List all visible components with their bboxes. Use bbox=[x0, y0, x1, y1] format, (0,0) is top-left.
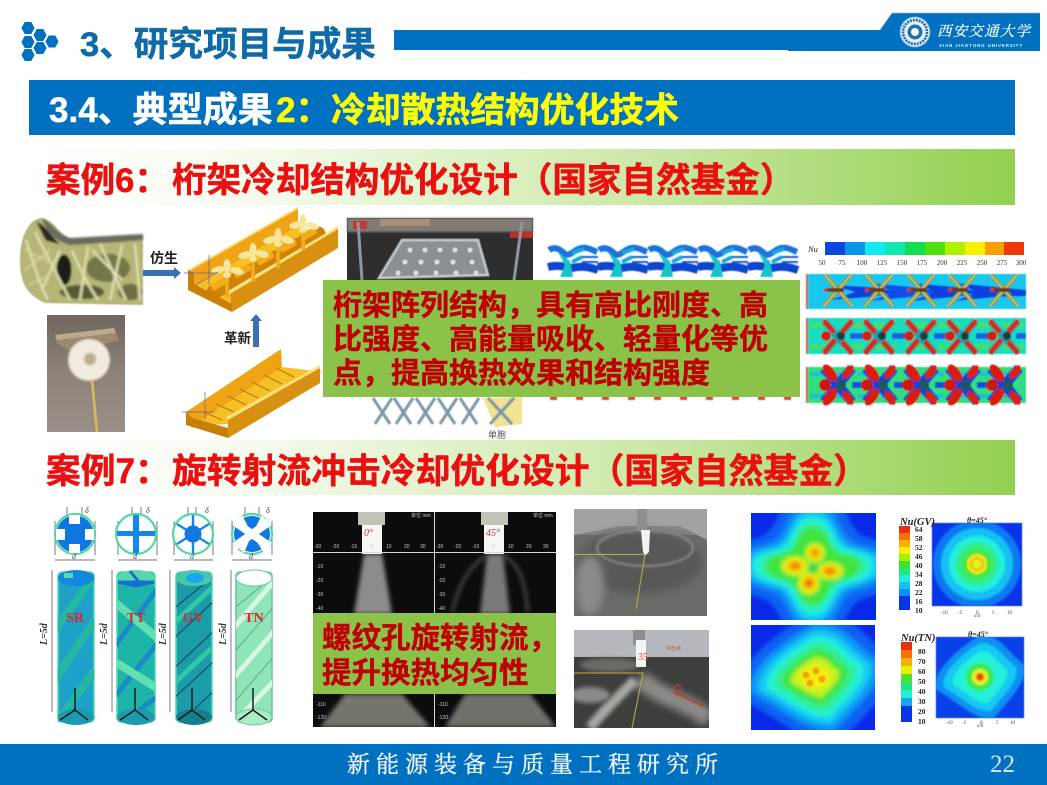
chart: Nu(TN) contour bbox=[900, 630, 1025, 729]
chart: Nu colour scale: Nu bbox=[807, 244, 818, 254]
chart: Nu(TN) contour: 80 bbox=[918, 647, 926, 656]
diagram: swirl tubes SR TT GV TN: L=5d bbox=[158, 622, 169, 646]
tube: SR: SR bbox=[66, 611, 85, 626]
chart: Nu(GV) contour: x/d bbox=[973, 614, 981, 619]
chart: Nu colour scale: 275 bbox=[997, 259, 1008, 267]
footer bar: 新能源装备与质量工程研究所 bbox=[347, 752, 724, 777]
figure: lattice unit cell: 单胞 bbox=[488, 429, 506, 440]
chart: Nu(TN) contour: 10 bbox=[1010, 721, 1016, 726]
tube: GV: GV bbox=[182, 611, 204, 626]
tube: SR bbox=[55, 570, 95, 725]
diagram: swirl hole cross-sections: d bbox=[190, 552, 195, 561]
figure: flow structures bbox=[548, 248, 798, 398]
photo: bone cross-section bbox=[20, 218, 143, 305]
chart: Nu colour scale bbox=[807, 242, 1027, 267]
header icon: honeycomb bbox=[22, 22, 58, 60]
chart: Nu contour rows bbox=[806, 274, 1026, 408]
chart: Nu(GV) contour: 40 bbox=[915, 561, 923, 570]
photo: jet flow visualisation: 30 bbox=[543, 544, 549, 550]
chart: Nu(GV) contour: 34 bbox=[915, 570, 923, 579]
callout: lattice array benefits: 桁架阵列结构，具有高比刚度、高 bbox=[333, 289, 768, 322]
diagram: swirl tubes SR TT GV TN bbox=[39, 570, 275, 730]
logo: Xi'an Jiaotong University: 西安交通大学 bbox=[937, 23, 1032, 40]
diagram: swirl tubes SR TT GV TN: L=5d bbox=[218, 622, 229, 646]
diagram: swirl hole cross-sections: δ bbox=[85, 506, 89, 515]
figure: lattice unit cell bbox=[373, 397, 522, 440]
photo: jet flow visualisation: -10 bbox=[472, 544, 479, 550]
photo: jet flow visualisation: -120 bbox=[316, 715, 326, 721]
photo: jet flow visualisation: -30 bbox=[436, 544, 443, 550]
photo: jet flow visualisation: -20 bbox=[316, 578, 323, 584]
callout: lattice array benefits: 点，提高换热效果和结构强度 bbox=[333, 357, 710, 390]
photo: jet flow visualisation: -20 bbox=[454, 544, 461, 550]
chart: Nu(GV) contour: 10 bbox=[1007, 611, 1012, 616]
footer bar: 22 bbox=[990, 751, 1015, 778]
photo: jet flow visualisation: -30 bbox=[316, 592, 323, 598]
banner: subsection title: 3.4、典型成果 bbox=[49, 91, 273, 130]
banner: case 7 title: 案例7： bbox=[46, 452, 170, 491]
photo: jet flow visualisation: -20 bbox=[332, 544, 339, 550]
chart: Nu(GV) contour: 28 bbox=[915, 579, 923, 588]
diagram: swirl hole cross-sections: δ bbox=[266, 506, 270, 515]
photo: jet flow visualisation: -30 bbox=[438, 592, 445, 598]
photo: dandelion carrying lattice bbox=[47, 315, 125, 432]
chart: Nu(GV) contour: 58 bbox=[915, 534, 923, 543]
photo: jet flow visualisation bbox=[313, 512, 556, 727]
diagram: swirl hole cross-sections: δ bbox=[146, 506, 150, 515]
photo: jet flow visualisation: -20 bbox=[438, 578, 445, 584]
chart: Nu(TN) contour: -5 bbox=[962, 721, 967, 726]
photo: jet flow visualisation: 10 bbox=[508, 544, 514, 550]
tube: TT: TT bbox=[127, 611, 146, 626]
photo: jet impingement angled: 冲击点 bbox=[666, 645, 681, 652]
banner: case 6 title: 案例6： bbox=[46, 162, 169, 200]
callout: threaded-hole swirl jet: 螺纹孔旋转射流， bbox=[322, 622, 558, 655]
photo: jet impingement angled: 35 bbox=[638, 652, 648, 663]
diagram: swirl hole cross-sections: d bbox=[249, 552, 254, 561]
chart: Nu colour scale: 150 bbox=[897, 259, 908, 267]
chart: Nu(GV) contour: 46 bbox=[915, 552, 923, 561]
chart: Nu colour scale: 50 bbox=[818, 259, 826, 267]
photo: jet flow visualisation: 0 bbox=[492, 544, 495, 550]
arrow: biomimicry: 仿生 bbox=[150, 250, 178, 266]
tube: TT bbox=[116, 570, 156, 725]
banner: case 6 title: 桁架冷却结构优化设计（国家自然基金） bbox=[172, 162, 794, 200]
chart: Nu(TN) contour: 50 bbox=[918, 677, 926, 686]
callout: lattice array benefits: 比强度、高能量吸收、轻量化等优 bbox=[333, 323, 768, 356]
photo: jet flow visualisation: 20 bbox=[404, 544, 410, 550]
photo: jet flow visualisation: 0 bbox=[370, 544, 373, 550]
chart: Nu(TN) contour: 10 bbox=[918, 717, 926, 726]
logo: Xi'an Jiaotong University: XIAN JIAOTONG UNIVERSITY bbox=[939, 43, 1023, 48]
photo: jet flow visualisation: 10 bbox=[386, 544, 392, 550]
photo: jet flow visualisation: -10 bbox=[316, 564, 323, 570]
banner: subsection title: 2： bbox=[276, 91, 330, 130]
chart: Nu colour scale: 200 bbox=[937, 259, 948, 267]
chart: Nu(GV) contour: 5 bbox=[992, 611, 995, 616]
chart: heat map upper bbox=[751, 513, 876, 620]
chart: Nu(TN) contour: 70 bbox=[918, 657, 926, 666]
photo: jet flow visualisation: -40 bbox=[316, 606, 323, 612]
chart: Nu(GV) contour: θ=45° bbox=[967, 516, 988, 525]
photo: jet flow visualisation: 45° bbox=[486, 528, 500, 539]
chart: Nu colour scale: 250 bbox=[977, 259, 988, 267]
tube: TN: TN bbox=[244, 611, 264, 626]
chart: Nu(TN) contour: Nu(TN) bbox=[900, 633, 935, 644]
chart: Nu(TN) contour: -10 bbox=[946, 721, 953, 726]
chart: Nu(TN) contour: 20 bbox=[918, 707, 926, 716]
photo: jet flow visualisation: -110 bbox=[438, 702, 448, 708]
chart: Nu(GV) contour: Nu(GV) bbox=[899, 517, 935, 528]
chart: Nu(GV) contour: -5 bbox=[958, 611, 963, 616]
banner: subsection title: 冷却散热结构优化技术 bbox=[331, 91, 679, 130]
arrow: innovation bbox=[224, 314, 262, 347]
chart: Nu colour scale: 225 bbox=[957, 259, 968, 267]
chart: Nu(GV) contour: 52 bbox=[915, 543, 923, 552]
header bar with logo tab bbox=[394, 13, 1040, 51]
photo: jet flow visualisation: 单位 mm bbox=[533, 512, 553, 519]
arrow: biomimicry bbox=[143, 250, 181, 279]
chart: Nu(TN) contour: x/d bbox=[976, 724, 984, 729]
chart: heat map lower bbox=[751, 625, 875, 730]
chart: Nu(GV) contour bbox=[899, 516, 1022, 619]
photo: jet impingement angled bbox=[570, 630, 709, 728]
chart: Nu(TN) contour: θ=45° bbox=[968, 630, 989, 639]
callout: lattice array benefits bbox=[323, 280, 800, 397]
chart: Nu(TN) contour: 5 bbox=[996, 721, 999, 726]
chart: Nu colour scale: 175 bbox=[917, 259, 928, 267]
banner: case 7 title bbox=[29, 440, 1015, 495]
diagram: lattice channel bbox=[184, 207, 338, 312]
photo: jet flow visualisation: -10 bbox=[350, 544, 357, 550]
photo: jet flow visualisation: -30 bbox=[314, 544, 321, 550]
photo: jet flow visualisation: -40 bbox=[438, 606, 445, 612]
diagram: swirl hole cross-sections bbox=[55, 506, 272, 561]
heading: section title: 3、研究项目与成果 bbox=[80, 26, 376, 64]
chart: Nu(GV) contour: -10 bbox=[941, 611, 948, 616]
chart: Nu(GV) contour: 16 bbox=[915, 597, 923, 606]
diagram: swirl hole cross-sections: d bbox=[72, 552, 77, 561]
footer bar bbox=[0, 744, 1047, 785]
chart: Nu(GV) contour: 10 bbox=[915, 606, 923, 615]
chart: Nu colour scale: 75 bbox=[838, 259, 846, 267]
chart: Nu(GV) contour: 64 bbox=[915, 525, 923, 534]
chart: Nu colour scale: 100 bbox=[857, 259, 868, 267]
diagram: swirl tubes SR TT GV TN: L=5d bbox=[39, 622, 50, 646]
chart: Nu colour scale: 300 bbox=[1016, 259, 1027, 267]
banner: subsection title bbox=[29, 80, 1015, 135]
photo: jet flow visualisation: -110 bbox=[316, 702, 326, 708]
chart: Nu(TN) contour: 60 bbox=[918, 667, 926, 676]
photo: experiment rig bbox=[347, 218, 533, 280]
logo: Xi'an Jiaotong University bbox=[900, 17, 1032, 48]
banner: case 7 title: 旋转射流冲击冷却优化设计（国家自然基金） bbox=[172, 452, 868, 491]
chart: Nu(GV) contour: 22 bbox=[915, 588, 923, 597]
diagram: swirl hole cross-sections: d bbox=[133, 552, 138, 561]
banner: case 6 title bbox=[29, 149, 1015, 205]
photo: jet flow visualisation: 单位 mm bbox=[411, 512, 431, 519]
chart: Nu(TN) contour: 0 bbox=[980, 721, 983, 726]
diagram: swirl hole cross-sections: δ bbox=[205, 506, 209, 515]
chart: Nu colour scale: 125 bbox=[877, 259, 888, 267]
callout: threaded-hole swirl jet: 提升换热均匀性 bbox=[322, 657, 529, 690]
photo: jet flow visualisation: 20 bbox=[526, 544, 532, 550]
chart: Nu(TN) contour: 30 bbox=[918, 697, 926, 706]
photo: jet flow visualisation: 30 bbox=[420, 544, 426, 550]
tube: GV bbox=[175, 570, 213, 725]
photo: jet flow visualisation: -10 bbox=[438, 564, 445, 570]
diagram: ribbed channel bbox=[182, 349, 322, 438]
photo: jet impingement top bbox=[574, 509, 707, 616]
photo: jet flow visualisation: -120 bbox=[438, 715, 448, 721]
tube: TN bbox=[235, 570, 273, 726]
chart: Nu(TN) contour: 40 bbox=[918, 687, 926, 696]
callout: threaded-hole swirl jet bbox=[313, 613, 558, 694]
photo: jet flow visualisation: 0° bbox=[364, 528, 373, 539]
chart: Nu(GV) contour: 0 bbox=[976, 611, 979, 616]
arrow: innovation: 革新 bbox=[224, 330, 251, 346]
diagram: swirl tubes SR TT GV TN: L=5d bbox=[99, 622, 110, 646]
